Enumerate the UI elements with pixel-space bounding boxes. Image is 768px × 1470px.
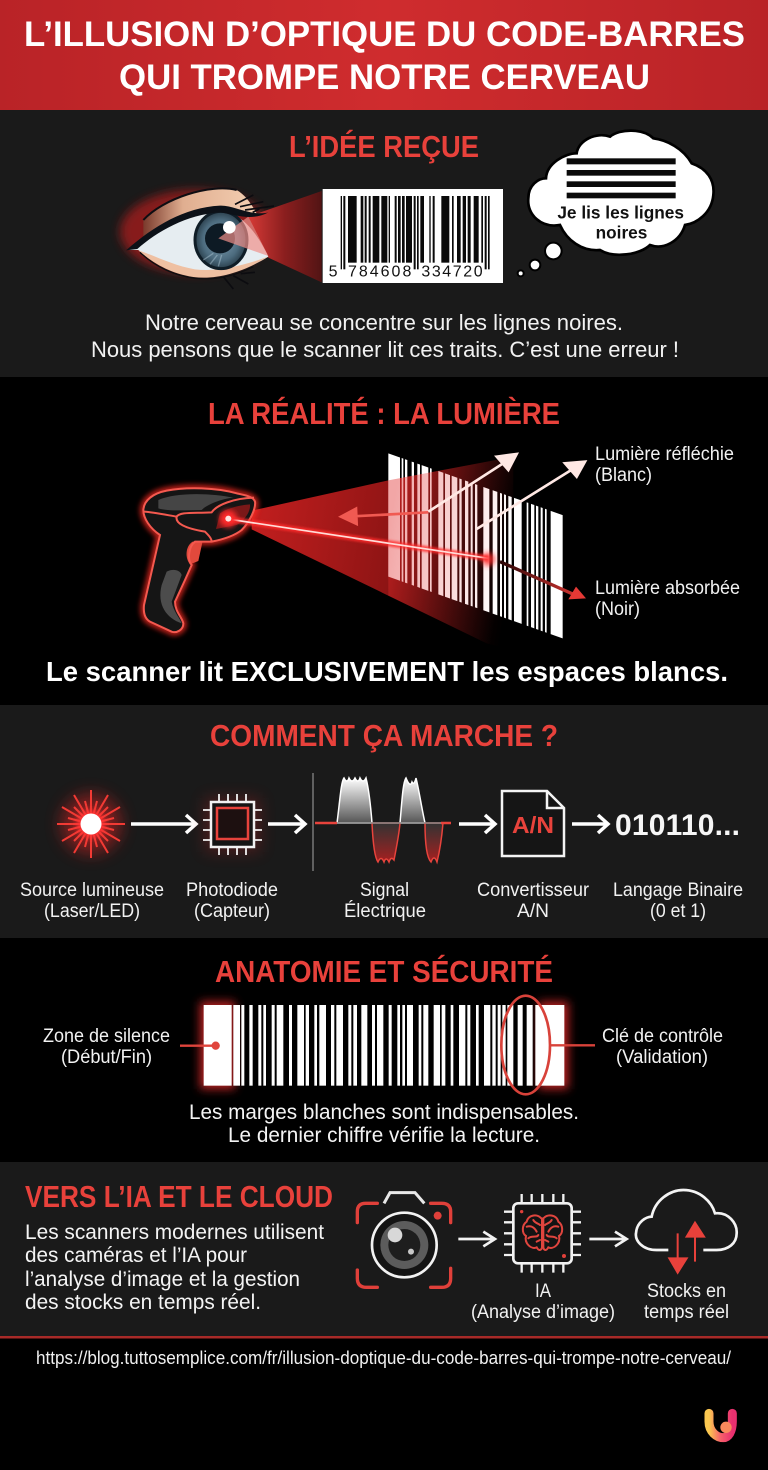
text: misconception explanation: Nous pensons que le scanner lit ces traits. C’est une erreur ! bbox=[91, 337, 679, 362]
chart: electrical signal bbox=[313, 773, 451, 871]
thought bubble: Je lis les lignes bbox=[557, 202, 684, 222]
binary output: 010110... bbox=[615, 809, 740, 842]
label: stocks bbox=[644, 1281, 729, 1323]
text: misconception explanation: Notre cerveau se concentre sur les lignes noires. bbox=[145, 310, 623, 335]
label: electrical signal: Électrique bbox=[344, 901, 426, 922]
label: AI bbox=[471, 1281, 615, 1323]
arrow: source to photodiode bbox=[131, 815, 196, 833]
text: AI explanation bbox=[25, 1220, 324, 1314]
panel: how it works bbox=[0, 705, 768, 938]
panel: misconception bbox=[0, 110, 768, 377]
label: reflected light: Lumière réfléchie bbox=[595, 444, 734, 465]
label: binary language bbox=[613, 880, 743, 922]
light cone bbox=[252, 457, 513, 650]
label: converter: A/N bbox=[517, 901, 549, 922]
label: absorbed light: Lumière absorbée bbox=[595, 578, 740, 599]
label: binary language: (0 et 1) bbox=[650, 901, 706, 922]
arrow: reflected light to scanner bbox=[341, 509, 428, 524]
panel: title banner bbox=[0, 0, 768, 110]
label: reflected light bbox=[595, 444, 734, 486]
barcode with digits: 5 bbox=[329, 263, 338, 280]
label: quiet zone: Zone de silence bbox=[43, 1026, 170, 1047]
laser beam bbox=[220, 510, 495, 566]
label: electrical signal: Signal bbox=[360, 880, 409, 901]
title: L’ILLUSION D’OPTIQUE DU CODE-BARRES bbox=[24, 15, 745, 54]
arrow: camera to AI bbox=[458, 1232, 495, 1246]
arrow: absorbed light bbox=[500, 562, 575, 595]
label: reflected light: (Blanc) bbox=[595, 465, 652, 486]
label: electrical signal bbox=[344, 880, 426, 922]
arrow: reflected light 1 bbox=[428, 454, 517, 512]
label: converter: Convertisseur bbox=[477, 880, 590, 901]
label: stocks: temps réel bbox=[644, 1302, 729, 1323]
icon: camera bbox=[357, 1193, 451, 1287]
heading: anatomy: ANATOMIE ET SÉCURITÉ bbox=[215, 954, 553, 989]
label: stocks: Stocks en bbox=[647, 1281, 726, 1302]
heading: reality: LA RÉALITÉ : LA LUMIÈRE bbox=[208, 396, 560, 431]
barcode with digits: 334720 bbox=[421, 263, 483, 280]
illustration: scanner, barcode and light rays bbox=[143, 453, 586, 650]
check digit ellipse and connector bbox=[501, 996, 595, 1094]
label: check digit: Clé de contrôle bbox=[602, 1026, 723, 1047]
barcode with digits: 784608 bbox=[348, 263, 411, 280]
thought bubble bbox=[518, 131, 714, 276]
skewed barcode bbox=[388, 453, 563, 638]
icon: photodiode chip bbox=[203, 794, 262, 855]
text: anatomy explanation: Les marges blanches sont indispensables. bbox=[189, 1100, 579, 1124]
title bbox=[24, 15, 745, 97]
label: light source: Source lumineuse bbox=[20, 880, 164, 901]
label: check digit: (Validation) bbox=[616, 1047, 708, 1068]
panel: reality of light bbox=[0, 377, 768, 705]
icons: camera, AI chip, cloud bbox=[357, 1190, 737, 1287]
label: quiet zone bbox=[43, 1026, 170, 1068]
icon: light source burst bbox=[57, 790, 125, 858]
text: anatomy explanation: Le dernier chiffre vérifie la lecture. bbox=[228, 1123, 540, 1147]
heading: how it works: COMMENT ÇA MARCHE ? bbox=[210, 718, 558, 753]
label: absorbed light bbox=[595, 578, 740, 620]
arrow: signal to converter bbox=[459, 815, 495, 833]
icon: cloud with sync arrows bbox=[636, 1190, 737, 1273]
label: photodiode: (Capteur) bbox=[194, 901, 270, 922]
icon: A/N document: A/N bbox=[512, 812, 554, 838]
cone tint over barcode bbox=[388, 457, 513, 650]
label: photodiode bbox=[186, 880, 278, 922]
barcode with digits bbox=[323, 189, 503, 283]
label: photodiode: Photodiode bbox=[186, 880, 278, 901]
text: misconception explanation bbox=[91, 310, 679, 362]
label: check digit bbox=[602, 1026, 723, 1068]
key statement: Le scanner lit EXCLUSIVEMENT les espaces blancs. bbox=[46, 656, 728, 687]
label: AI: (Analyse d’image) bbox=[471, 1302, 615, 1323]
label: light source: (Laser/LED) bbox=[44, 901, 140, 922]
barcode anatomy diagram bbox=[180, 996, 595, 1094]
arrow: photodiode to signal bbox=[268, 815, 305, 833]
icon: A/N document bbox=[502, 791, 564, 856]
text: AI explanation: Les scanners modernes utilisent bbox=[25, 1220, 324, 1244]
label: binary language: Langage Binaire bbox=[613, 880, 743, 901]
scanner gun bbox=[143, 488, 255, 632]
text: AI explanation: l’analyse d’image et la gestion bbox=[25, 1267, 300, 1291]
text: AI explanation: des caméras et l’IA pour bbox=[25, 1243, 247, 1267]
source URL: https://blog.tuttosemplice.com/fr/illusion-doptique-du-code-barres-qui-trompe-notre-cerveau/ bbox=[36, 1348, 731, 1368]
arrow: AI to cloud bbox=[589, 1232, 627, 1246]
panel: AI and cloud bbox=[0, 1162, 768, 1337]
text: AI explanation: des stocks en temps réel. bbox=[25, 1290, 261, 1314]
arrow: converter to binary bbox=[572, 815, 608, 833]
label: light source bbox=[20, 880, 164, 922]
title: QUI TROMPE NOTRE CERVEAU bbox=[119, 58, 650, 97]
label: AI: IA bbox=[535, 1281, 551, 1302]
arrow: reflected light 2 bbox=[477, 462, 585, 529]
icon: logo bbox=[709, 1413, 732, 1438]
footer divider bbox=[0, 1336, 768, 1338]
label: quiet zone: (Début/Fin) bbox=[61, 1047, 152, 1068]
icon: AI chip with brain bbox=[504, 1194, 581, 1273]
label: converter bbox=[477, 880, 590, 922]
panel: anatomy and security bbox=[0, 938, 768, 1162]
label: absorbed light: (Noir) bbox=[595, 599, 640, 620]
text: anatomy explanation bbox=[189, 1100, 579, 1147]
heading: AI and cloud: VERS L’IA ET LE CLOUD bbox=[25, 1179, 333, 1214]
icon: eye with gaze beam bbox=[120, 188, 322, 289]
heading: misconception: L’IDÉE REÇUE bbox=[289, 129, 479, 164]
connector: quiet zone bbox=[180, 1042, 220, 1050]
thought bubble: noires bbox=[596, 222, 647, 242]
